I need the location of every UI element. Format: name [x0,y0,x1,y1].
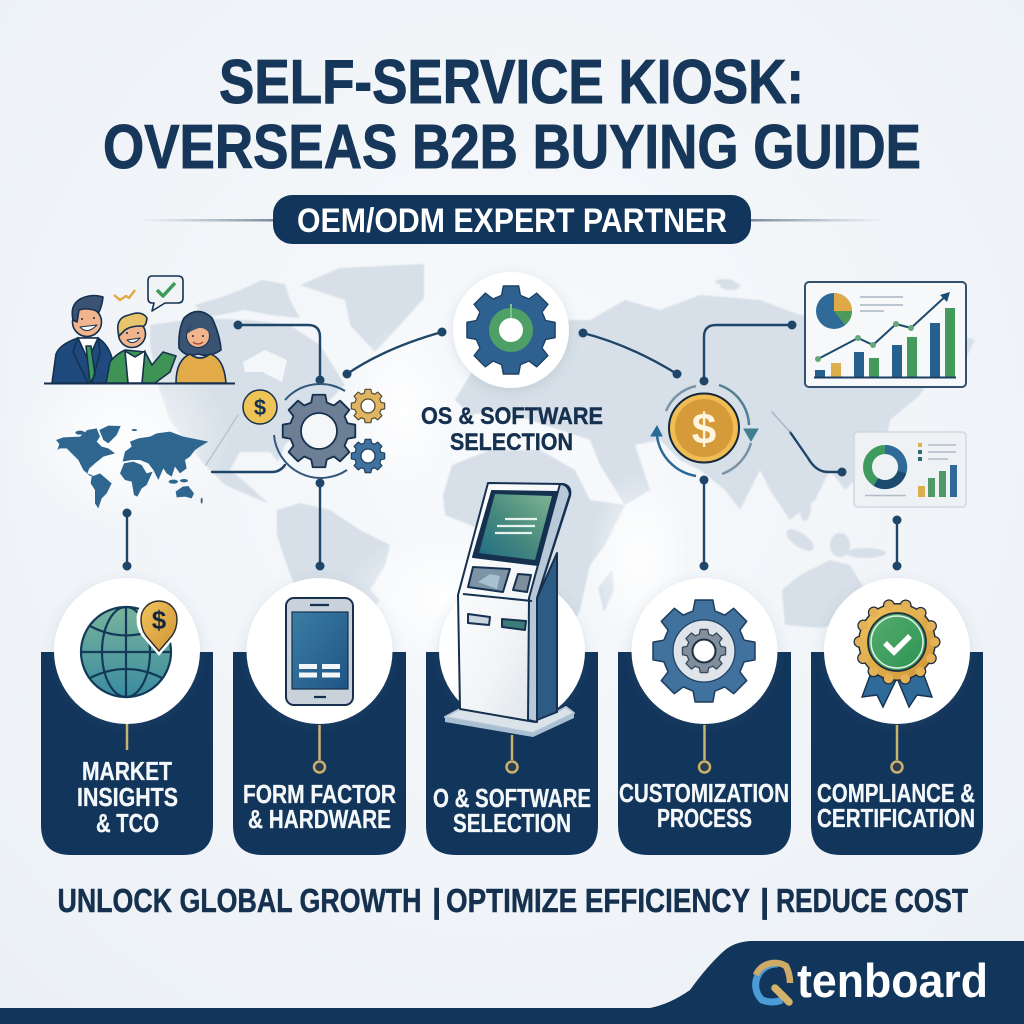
card label: CERTIFICATION [817,803,975,833]
card label: O & SOFTWARE [433,783,591,813]
label: OS & software selection: SELECTION [450,429,573,456]
icon: main grey gear [283,395,355,467]
card label: COMPLIANCE & [817,778,975,808]
kiosk body [458,483,570,722]
tagline: | [432,882,441,919]
panel: form factor card [233,578,406,855]
arcs around gear [274,384,347,478]
kiosk divider and slots [463,594,532,630]
icon: speech bubble with check [148,276,183,311]
card label: MARKET [82,756,172,786]
logo: Qtenboard: tenboard [797,954,988,1007]
small world map [56,426,208,508]
connector [892,725,902,772]
card label [619,778,789,833]
illustration: business people [44,276,235,384]
tagline: REDUCE COST [776,882,968,919]
illustration: self-service kiosk [445,483,574,737]
bar chart [814,308,956,378]
card label [433,783,591,838]
icon: smartphone [286,598,353,705]
icon: certification medal [858,603,936,707]
icon: blue small gear [351,439,385,473]
card label [77,756,178,838]
icon: globe with pin [81,599,179,697]
card label: FORM FACTOR [243,779,396,809]
panel: OS gear circle [453,272,569,388]
person: woman in yellow top [176,312,226,383]
tagline: UNLOCK GLOBAL GROWTH [58,882,422,919]
card label: & TCO [96,808,159,838]
icon: central dollar coin [651,385,758,476]
card label: CUSTOMIZATION [619,778,789,808]
chart panel: donut and bars [854,432,966,507]
icon: nested gear [653,600,755,702]
chart panel: pie and bars [805,282,966,387]
card label: SELECTION [453,808,571,838]
person: man in green jacket [106,313,176,383]
panel: software selection card [426,578,598,855]
card label [243,779,396,834]
legend lines [860,297,903,311]
Hudson bay and glow overlays [10,325,690,670]
icon: gold sparkle mark [114,290,135,300]
background world map [150,264,975,650]
card label: PROCESS [657,803,752,833]
connector [314,725,325,772]
donut chart [868,449,903,485]
icon: small dollar coin [243,390,277,424]
card label: & HARDWARE [248,804,391,834]
subtitle pill: OEM/ODM EXPERT PARTNER [297,202,727,240]
kiosk keypad [468,567,510,592]
panel: market insights card [41,578,213,855]
label: OS & software selection [421,403,603,456]
title: SELF-SERVICE KIOSK: [219,48,804,117]
label: OS & software selection: OS & SOFTWARE [421,403,603,430]
panel: customization card [618,578,791,855]
tagline: | [760,882,769,919]
legend [865,443,956,496]
connector [126,724,128,750]
tagline: OPTIMIZE EFFICIENCY [446,882,750,919]
icon: globe with pin: $ [152,605,167,635]
person: man in navy suit [52,296,112,383]
panel: compliance card [811,578,983,855]
icon: central dollar coin: $ [692,405,716,454]
ground line [44,382,235,384]
connector [506,735,518,772]
kiosk side panel [537,553,557,720]
kiosk card reader [513,574,531,592]
tagline [58,882,968,919]
icon: gold small gear [351,389,385,423]
icon: gears and coin [243,384,385,478]
icon: small dollar coin: $ [254,395,266,420]
logo mark [756,963,790,1002]
pie chart [816,293,852,329]
subtitle pill [140,195,885,244]
card label [817,778,975,833]
kiosk base [445,707,574,733]
trend line with arrow [815,292,950,362]
small bars [918,465,957,497]
title [103,48,921,182]
kiosk screen [473,491,557,565]
card label: INSIGHTS [77,782,178,812]
connector [699,725,710,772]
footer band [0,941,1024,1024]
connector lines [122,320,902,570]
